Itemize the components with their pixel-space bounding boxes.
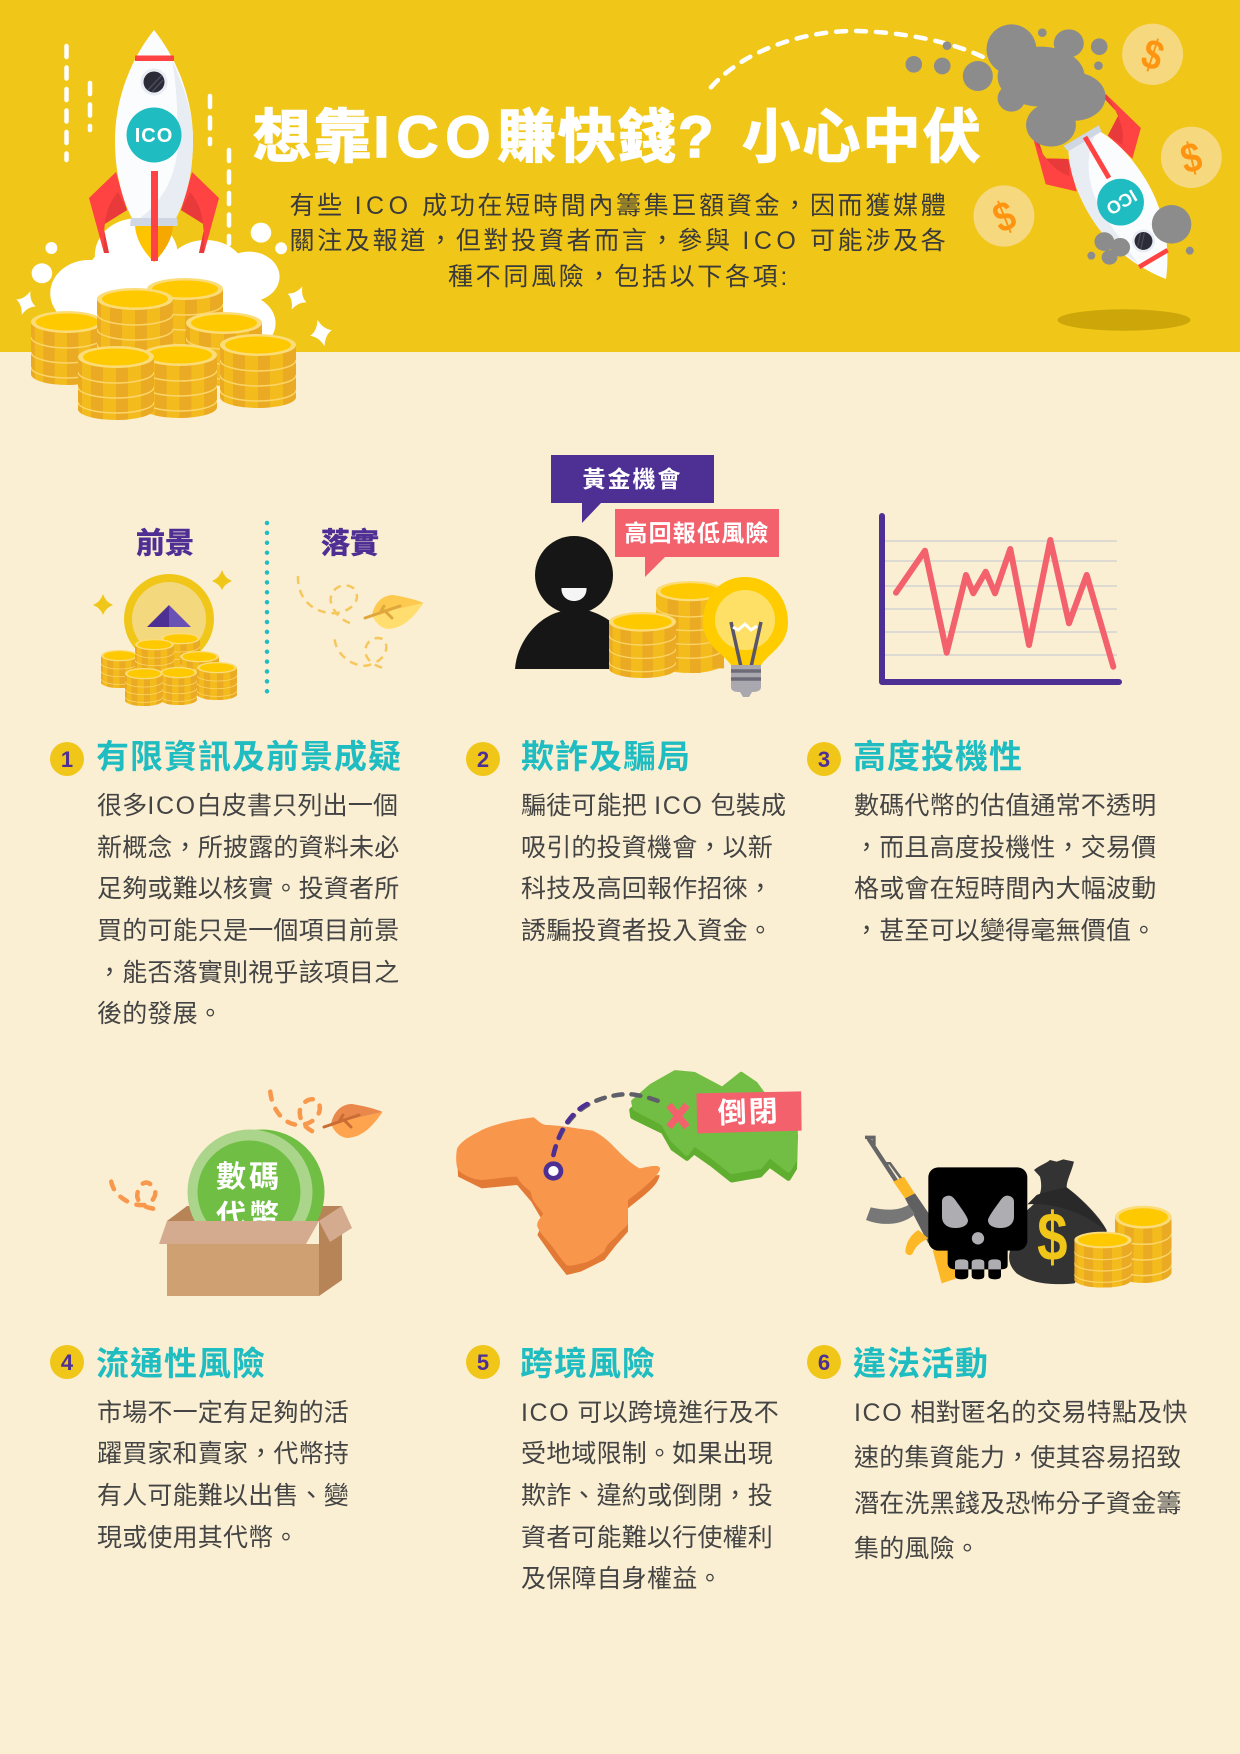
number badge 6: 6 — [818, 1350, 830, 1375]
illustration 4: token in a box — [111, 1092, 382, 1296]
section 2 — [466, 738, 786, 945]
illustration 5: cross-border map — [456, 1073, 802, 1275]
body text 5: 資者可能難以行使權利 — [521, 1524, 773, 1552]
dollar coins: $ — [1136, 30, 1169, 81]
illustration 1: prospects vs reality — [93, 523, 424, 706]
speech bubble: golden opportunity: 黃金機會 — [582, 466, 682, 492]
dashed flight path — [711, 31, 986, 87]
africa landmass — [456, 1117, 660, 1275]
rocket: ICO — [135, 125, 173, 147]
title: 想靠ICO賺快錢? 小心中伏 — [253, 105, 983, 170]
heading 3: 高度投機性 — [853, 738, 1023, 775]
leaf — [324, 1104, 382, 1138]
number badge 4 — [50, 1345, 84, 1379]
body text 1 — [97, 792, 399, 1028]
illustration 6: illegal activity — [865, 1137, 1172, 1288]
body text 6: ICO 相對匿名的交易特點及快 — [854, 1399, 1188, 1427]
skull — [928, 1167, 1027, 1279]
grid lines — [885, 541, 1117, 655]
intro paragraph: 種不同風險，包括以下各項: — [448, 263, 790, 291]
coin stacks — [609, 581, 724, 678]
intro paragraph: 關注及報道，但對投資者而言，參與 ICO 可能涉及各 — [290, 227, 948, 255]
rifle — [865, 1137, 957, 1283]
body text 1: 新概念，所披露的資料未必 — [97, 834, 399, 862]
body text 1: 很多ICO白皮書只列出一個 — [97, 792, 398, 820]
smoke cloud — [32, 218, 287, 353]
number badge 5: 5 — [477, 1350, 489, 1375]
money bag — [1009, 1159, 1107, 1284]
dollar coins: $ — [1176, 134, 1207, 183]
dashed trails — [111, 1092, 320, 1209]
illustration 2: scammer with speech bubbles — [515, 455, 788, 697]
body text 2 — [521, 792, 786, 945]
number badge 2: 2 — [477, 747, 489, 772]
body text 5: 受地域限制。如果出現 — [521, 1440, 773, 1468]
body text 1: 後的發展。 — [97, 1000, 223, 1028]
body text 1: 足夠或難以核實。投資者所 — [97, 875, 399, 903]
price line — [896, 540, 1113, 667]
body text 2: 騙徒可能把 ICO 包裝成 — [521, 792, 786, 820]
body text 4: 有人可能難以出售、變 — [97, 1482, 349, 1510]
number badge 5 — [466, 1345, 500, 1379]
smoke — [905, 24, 1194, 265]
body text 3: 格或會在短時間內大幅波動 — [854, 875, 1156, 903]
body text 2: 吸引的投資機會，以新 — [521, 834, 773, 862]
body text 5 — [521, 1399, 779, 1593]
ground shadow — [1058, 309, 1190, 331]
number badge 6 — [807, 1345, 841, 1379]
falling rocket: ICO — [1103, 185, 1140, 219]
section 4 — [50, 1345, 349, 1552]
light bulb — [703, 577, 788, 697]
green token — [188, 1130, 324, 1254]
speech bubble: golden opportunity — [551, 455, 714, 523]
header band — [0, 0, 1240, 352]
body text 6: 潛在洗黑錢及恐怖分子資金籌 — [854, 1490, 1182, 1518]
body text 6 — [854, 1399, 1188, 1563]
body text 6: 速的集資能力，使其容易招致 — [854, 1444, 1182, 1472]
speech bubble: high return low risk — [615, 509, 779, 577]
number badge 1 — [50, 742, 84, 776]
big coin with triangle — [93, 570, 232, 664]
heading 2: 欺詐及騙局 — [521, 738, 691, 775]
dotted divider — [265, 523, 269, 692]
heading 5: 跨境風險 — [520, 1345, 656, 1382]
label: prospects: 前景 — [136, 527, 194, 560]
coin stacks — [31, 278, 296, 420]
money bag: $ — [1037, 1200, 1068, 1276]
green token: 代幣 — [216, 1200, 282, 1233]
body text 4: 現或使用其代幣。 — [97, 1524, 299, 1552]
section 1 — [50, 738, 402, 1028]
coin stacks — [1074, 1206, 1172, 1288]
intro paragraph — [290, 192, 948, 291]
body text 3: ，甚至可以變得毫無價值。 — [854, 917, 1156, 945]
heading 6: 違法活動 — [853, 1345, 989, 1382]
body text 4: 市場不一定有足夠的活 — [97, 1399, 349, 1427]
number badge 1: 1 — [61, 747, 73, 772]
illustration: crashing rocket with smoke and coins — [711, 24, 1222, 331]
red cross — [669, 1105, 687, 1127]
body text 1: 買的可能只是一個項目前景 — [97, 917, 399, 945]
number badge 3 — [807, 742, 841, 776]
number badge 2 — [466, 742, 500, 776]
section 3 — [807, 738, 1156, 945]
speech bubble: high return low risk: 高回報低風險 — [624, 520, 770, 546]
heading 4: 流通性風險 — [96, 1345, 266, 1382]
illustration: rocket launch with coins — [12, 30, 335, 420]
label text: 倒閉 — [717, 1095, 780, 1130]
body text 4: 躍買家和賣家，代幣持 — [97, 1440, 349, 1468]
green landmass — [632, 1073, 795, 1180]
box back — [167, 1206, 342, 1221]
body text 2: 科技及高回報作招徠， — [521, 875, 773, 903]
label: delivery: 落實 — [321, 527, 379, 560]
axes — [882, 516, 1119, 682]
body text 5: ICO 可以跨境進行及不 — [521, 1399, 779, 1427]
section 5 — [466, 1345, 779, 1593]
body text 3 — [854, 792, 1156, 945]
dashed route — [553, 1094, 664, 1155]
origin marker — [543, 1161, 563, 1181]
heading 1: 有限資訊及前景成疑 — [96, 738, 402, 775]
dollar coins: $ — [987, 192, 1023, 243]
red label — [696, 1091, 802, 1133]
number badge 3: 3 — [818, 747, 830, 772]
person silhouette — [515, 536, 625, 669]
green token: 數碼 — [216, 1161, 282, 1194]
body text 5: 欺詐、違約或倒閉，投 — [521, 1482, 773, 1510]
speed dashes — [66, 46, 229, 244]
sparkles — [12, 282, 335, 349]
body text 3: 數碼代幣的估值通常不透明 — [854, 792, 1156, 820]
body text 6: 集的風險。 — [854, 1535, 980, 1563]
falling leaf with dashed trail — [298, 576, 424, 669]
section 6 — [807, 1345, 1188, 1563]
rocket — [89, 30, 219, 262]
dollar coins — [973, 24, 1222, 247]
number badge 4: 4 — [61, 1350, 74, 1375]
body text 3: ，而且高度投機性，交易價 — [854, 834, 1156, 862]
illustration 3: volatile price chart — [882, 516, 1119, 682]
body text 5: 及保障自身權益。 — [521, 1565, 723, 1593]
small coin stacks — [101, 633, 237, 706]
falling rocket — [1022, 88, 1214, 307]
cardboard box — [159, 1206, 352, 1296]
body text 1: ，能否落實則視乎該項目之 — [97, 959, 399, 987]
body text 4 — [97, 1399, 349, 1552]
body text 2: 誘騙投資者投入資金。 — [521, 917, 773, 945]
intro paragraph: 有些 ICO 成功在短時間內籌集巨額資金，因而獲媒體 — [290, 192, 948, 220]
